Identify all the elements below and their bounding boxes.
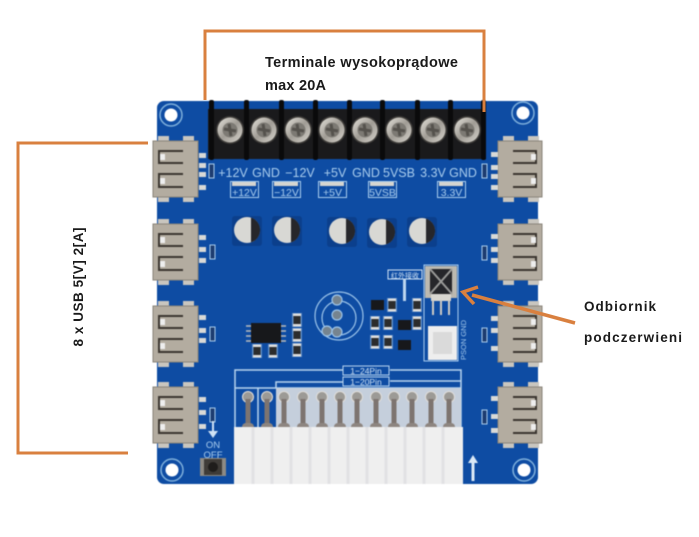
- heading: high-current terminals label: Terminale wysokoprądowe: [265, 55, 458, 71]
- pin header labels: 1−24Pin: [350, 366, 382, 376]
- IR receiver: [388, 265, 458, 361]
- voltage labels: 5VSB: [383, 166, 415, 180]
- voltage labels: +5V: [324, 166, 347, 180]
- IR receiver: 红外接收: [391, 271, 419, 280]
- white connector: [428, 319, 468, 360]
- arrow: IR receiver: [463, 287, 575, 323]
- circuit board: −12V: [274, 187, 299, 199]
- bracket: USB ports: [18, 143, 148, 453]
- heading: max current: max 20A: [265, 78, 327, 94]
- voltage indicator boxes: [230, 182, 466, 198]
- ATX translucent area and pins: [242, 388, 461, 432]
- circuit board: +5V: [323, 187, 342, 199]
- circuit board: 3.3V: [441, 187, 462, 199]
- voltage labels: GND: [252, 166, 280, 180]
- small components: [252, 298, 422, 358]
- white up arrow: [468, 455, 478, 481]
- circuit board: [153, 100, 542, 484]
- label: USB ports: 8 x USB 5[V] 2[A]: [71, 228, 86, 346]
- capacitors: [232, 216, 437, 248]
- IC chip: [246, 323, 286, 343]
- large capacitor outline: [315, 292, 363, 340]
- bracket: high-current terminals: [205, 31, 484, 112]
- on off switch: [200, 421, 226, 476]
- circuit board: +12V: [232, 187, 257, 199]
- on off switch: OFF: [204, 450, 223, 461]
- ATX connector silk outlines: [235, 370, 461, 427]
- label: IR receiver second line: podczerwieni: [584, 330, 682, 345]
- voltage labels: GND: [352, 166, 380, 180]
- USB side pads: [199, 152, 498, 433]
- USB side resistors: [209, 164, 487, 424]
- ATX white connector: [234, 427, 463, 484]
- label: IR receiver: Odbiornik: [584, 299, 656, 314]
- terminal block: [208, 100, 486, 160]
- white connector: PSON GND: [459, 319, 468, 360]
- USB ports right: [498, 136, 542, 448]
- pin header labels: 1−20Pin: [350, 377, 382, 387]
- on off switch: ON: [206, 440, 220, 451]
- voltage labels: +12V: [218, 166, 248, 180]
- voltage labels: [218, 166, 477, 180]
- voltage labels: −12V: [285, 166, 315, 180]
- mounting holes: [160, 102, 535, 481]
- circuit board: 5VSB: [369, 187, 396, 199]
- voltage labels: 3.3V: [420, 166, 447, 180]
- voltage labels: GND: [449, 166, 477, 180]
- pin header labels: [343, 366, 389, 387]
- USB ports left: [153, 136, 198, 448]
